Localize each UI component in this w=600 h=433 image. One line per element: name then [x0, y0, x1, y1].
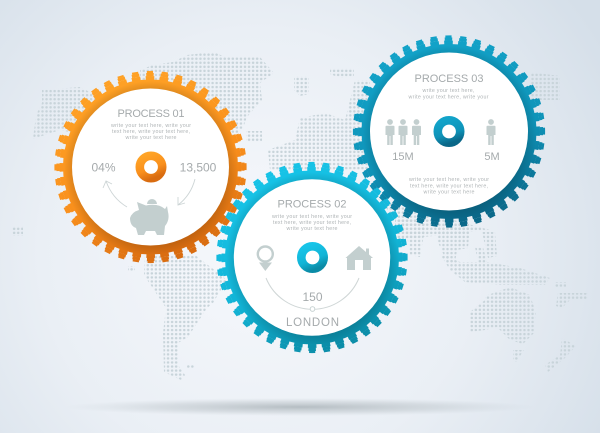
floor shadow	[65, 398, 535, 416]
icon: house	[346, 246, 373, 270]
icon: location pin	[258, 246, 273, 271]
icon: three people	[386, 119, 421, 145]
heading: PROCESS 02	[278, 199, 346, 211]
text block bottom: write your text here, write your	[409, 177, 489, 183]
text block: write your text here, write your	[272, 214, 352, 220]
text block bottom: write your text here	[424, 190, 475, 196]
disc shadow	[64, 81, 238, 255]
hub ring	[140, 156, 162, 178]
text block bottom	[409, 177, 489, 196]
heading: PROCESS 03	[414, 73, 484, 85]
stat: 150: 150	[302, 290, 323, 304]
arrow right	[178, 179, 195, 205]
gear teeth cyan	[218, 163, 406, 352]
text block: write your text here	[126, 135, 177, 141]
disc	[234, 179, 390, 336]
heading: PROCESS 01	[118, 108, 184, 120]
icon: one person	[486, 119, 496, 145]
text block: write your text here, write your	[111, 123, 191, 129]
text block: write your text here	[286, 226, 338, 232]
stat: 04%: 04%	[91, 160, 116, 174]
hub ring	[438, 120, 460, 143]
stat: 15M: 15M	[392, 151, 414, 163]
gear teeth orange	[56, 72, 246, 262]
hub ring	[301, 246, 324, 269]
disc shadow	[362, 46, 536, 220]
text block: text here, write your text here,	[273, 220, 351, 226]
text block top	[408, 88, 489, 100]
text block top: write your text here, write your	[408, 94, 489, 100]
stat: 5M: 5M	[484, 151, 500, 163]
icon: piggy bank	[130, 199, 169, 235]
gear 2: process 02	[218, 163, 406, 352]
text block bottom: text here, write your text here,	[410, 183, 488, 189]
arc scale	[266, 278, 359, 311]
gear 1: process 01	[56, 72, 246, 262]
arrow left	[103, 181, 127, 207]
text block	[272, 214, 352, 232]
text block: text here, write your text here,	[112, 129, 190, 135]
text block	[111, 123, 191, 141]
gear 3: process 03	[354, 36, 544, 226]
disc	[72, 88, 229, 246]
dotted world map	[12, 52, 588, 380]
gear teeth dark blue	[354, 36, 544, 226]
disc	[370, 52, 528, 210]
stat: 13,500: 13,500	[180, 160, 217, 174]
label: London: LONDON	[286, 317, 339, 329]
text block top: write your text here,	[422, 88, 474, 94]
disc shadow	[226, 172, 399, 345]
